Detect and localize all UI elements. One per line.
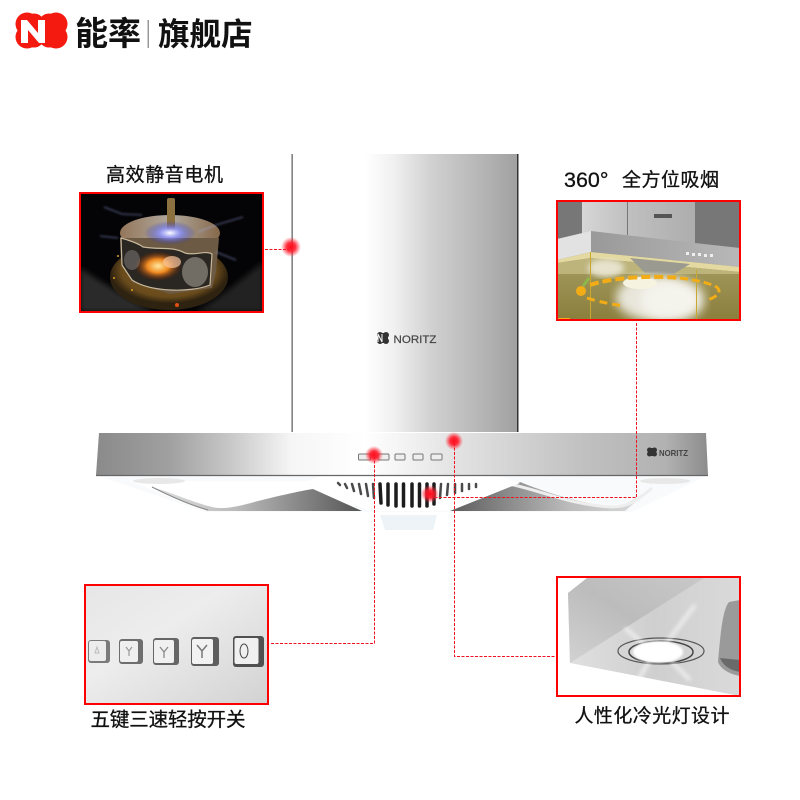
heading: motor: 高效静音电机 <box>106 164 223 186</box>
heading: lamp: 人性化冷光灯设计 <box>574 705 730 727</box>
callout: quiet motor <box>79 164 264 313</box>
callout: 360 smoke suction <box>556 168 741 322</box>
panel: motor photo <box>79 192 264 313</box>
button 5 <box>233 636 264 667</box>
fan grille <box>303 476 520 511</box>
red hotspot: canopy light <box>445 432 463 450</box>
canopy logo <box>647 448 688 458</box>
chimney logo <box>377 332 437 346</box>
heading: switch: 五键三速轻按开关 <box>90 709 246 731</box>
panel: suction photo <box>556 200 741 322</box>
logo mark: red N badge <box>16 12 68 48</box>
button 4 <box>191 637 219 666</box>
callout leader lines <box>265 250 636 656</box>
red hotspot: suction <box>421 485 439 503</box>
canopy logo: NORITZ <box>659 448 688 458</box>
button 2 <box>119 639 143 664</box>
callout: cold light lamp <box>556 576 741 727</box>
control buttons on canopy <box>358 454 442 460</box>
logo text: flagship store: 旗舰店 <box>158 16 253 52</box>
red hotspot: buttons <box>365 446 383 464</box>
hood canopy <box>96 433 708 475</box>
lamp housing <box>380 515 437 530</box>
heading: suction: 360° <box>564 168 608 192</box>
panel: buttons photo <box>84 584 269 705</box>
button 1 <box>88 640 110 663</box>
hood underside <box>96 475 708 530</box>
callout: 360 smoke suction: 全方位吸烟 <box>622 169 719 191</box>
hood chimney <box>292 154 518 432</box>
button 3 <box>153 638 179 665</box>
range hood product <box>96 154 708 530</box>
brand logo <box>16 12 253 52</box>
logo text: brand name: 能率 <box>75 15 141 52</box>
callout: five-key switch <box>84 584 269 731</box>
red hotspot: motor <box>281 237 301 257</box>
panel: lamp photo <box>556 576 741 697</box>
chimney logo: NORITZ <box>394 334 437 346</box>
